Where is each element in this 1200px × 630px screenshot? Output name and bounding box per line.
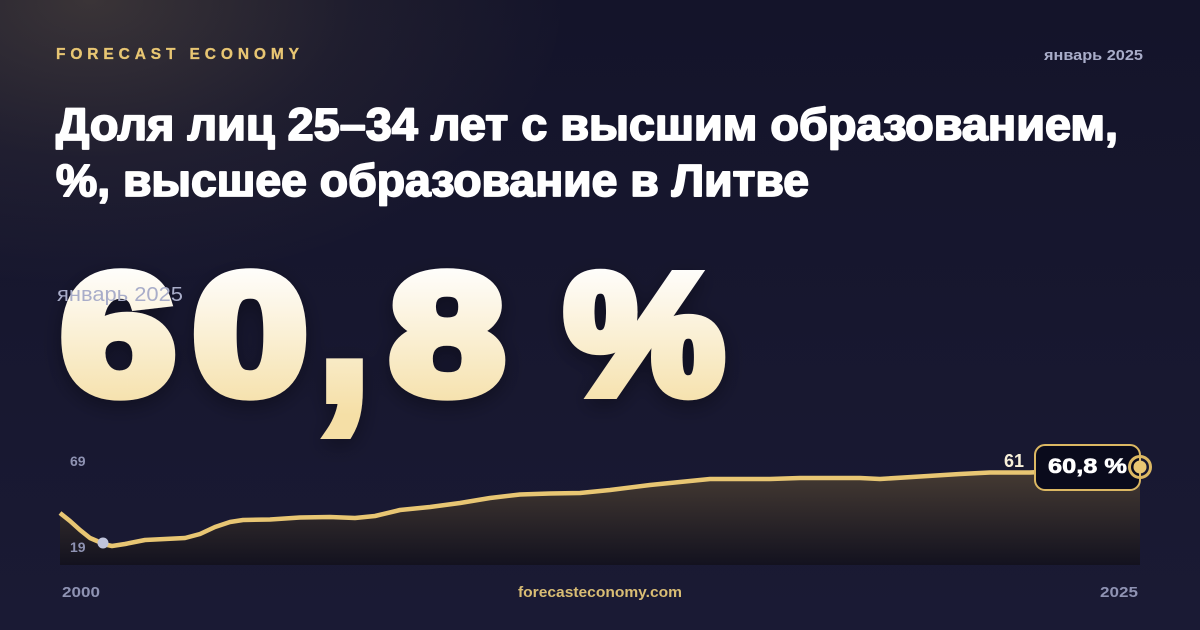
area fill: [60, 467, 1140, 565]
big value: 8: [390, 239, 504, 429]
x axis start: 2000: [62, 584, 100, 601]
big value: 0: [193, 239, 307, 429]
value callout: 60,8 %: [1048, 455, 1127, 478]
value callout: [1035, 445, 1140, 490]
date under title: январь 2025: [57, 284, 183, 306]
chart: [60, 445, 1150, 601]
date top right: январь 2025: [1044, 47, 1143, 64]
title: [56, 99, 1118, 206]
trend line: [60, 467, 1140, 546]
x axis end: 2025: [1100, 584, 1138, 601]
brand label: FORECAST ECONOMY: [56, 46, 300, 63]
title: Доля лиц 25–34 лет с высшим образованием,: [56, 99, 1118, 150]
source: forecasteconomy.com: [518, 584, 682, 601]
minimum marker: [98, 538, 108, 548]
last value label: 61: [1004, 451, 1024, 471]
end marker: [1130, 456, 1150, 478]
big value: [61, 194, 724, 447]
axis max label: 69: [70, 453, 86, 469]
big value: 6: [61, 239, 175, 429]
title: %, высшее образование в Литве: [56, 155, 809, 206]
big value: %: [565, 239, 724, 429]
big value: ,: [318, 194, 370, 447]
axis min label: 19: [70, 539, 86, 555]
